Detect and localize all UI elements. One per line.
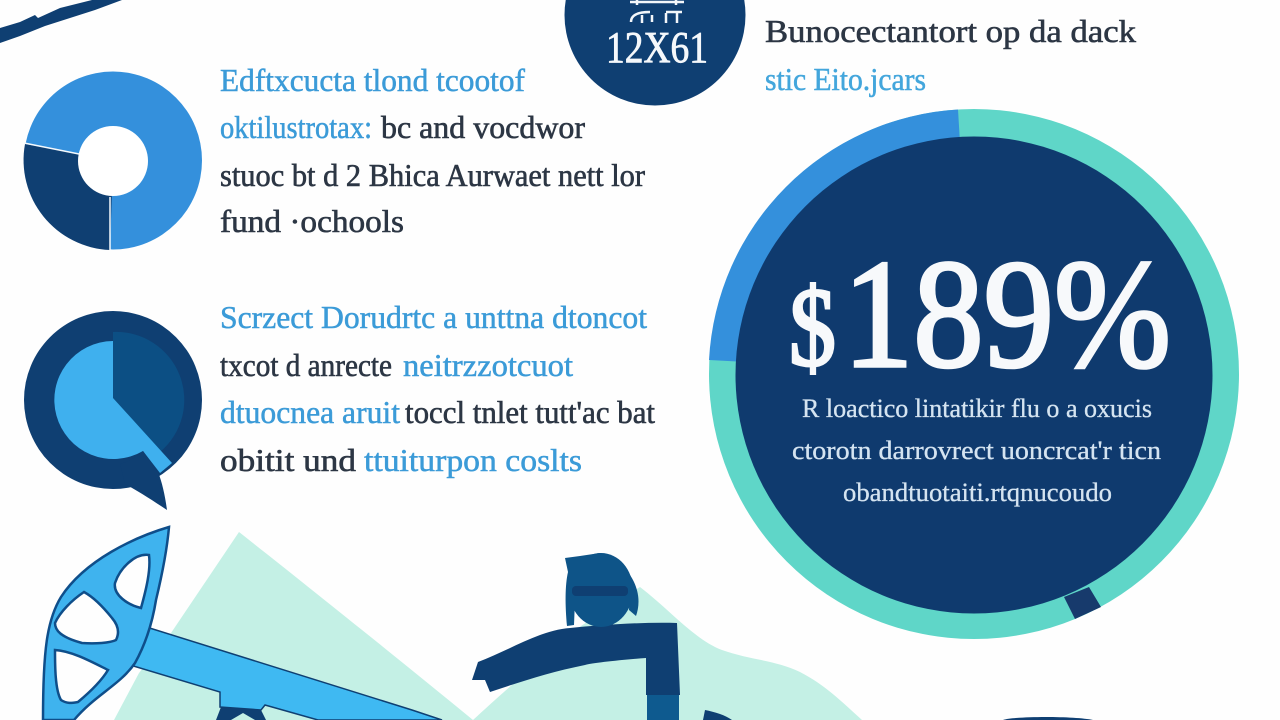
- icon: building glyph: [630, 0, 684, 23]
- text block: direct revenue: dtuocnea aruit: [220, 394, 400, 430]
- horse head: [43, 527, 169, 720]
- illustration: pumpjack: [43, 527, 442, 720]
- stat badge: top circle: [564, 0, 746, 106]
- illustration: small shape at bottom: [703, 710, 732, 720]
- chart: big ring with main stat: [709, 109, 1239, 639]
- stat: dollar sign: $: [789, 266, 836, 390]
- stat number: 12X61: [606, 23, 708, 72]
- text block: education funding: bc and vocdwor: [381, 109, 585, 145]
- text block: direct revenue: toccl tnlet tutt'ac bat: [405, 394, 655, 430]
- text block: direct revenue: neitrzzotcuot: [403, 347, 573, 383]
- icon: speech bubble chart: [24, 311, 202, 510]
- text block: top-right caption: Bunocectantort op da dack: [765, 13, 1136, 49]
- visor band: [572, 586, 628, 596]
- text block: ring caption: ctorotn darrovrect uoncrcat'r ticn: [792, 436, 1161, 465]
- text block: direct revenue: [220, 299, 655, 478]
- text block: ring caption: obandtuotaiti.rtqnucoudo: [843, 478, 1112, 507]
- text block: education funding: oktilustrotax:: [220, 109, 372, 145]
- stand: [216, 707, 266, 720]
- text block: education funding: stuoc bt d 2 Bhica Aurwaet nett lor: [220, 157, 645, 193]
- body and arm: [472, 623, 680, 695]
- illustration: mint hills: [114, 532, 862, 720]
- text block: education funding: Edftxcucta tlond tcootof: [220, 62, 525, 98]
- text block: direct revenue: Scrzect Dorudrtc a unttna dtoncot: [220, 299, 647, 335]
- text block: top-right caption: [765, 13, 1136, 97]
- stat: percentage: 189%: [843, 228, 1171, 400]
- text block: education funding: fund ·ochools: [220, 203, 404, 239]
- text block: direct revenue: obitit und: [220, 442, 356, 478]
- lower body: [647, 695, 679, 720]
- icon: top-left dark brush stroke: [0, 0, 122, 43]
- chart: donut: [24, 72, 202, 250]
- text block: ring caption: R loactico lintatikir flu o a oxucis: [802, 394, 1152, 423]
- text block: direct revenue: ttuiturpon coslts: [364, 442, 582, 478]
- beam: [130, 625, 442, 720]
- text block: ring caption: [792, 394, 1161, 507]
- illustration: dark shape bottom right: [1003, 717, 1093, 720]
- illustration: person: [472, 553, 680, 720]
- head: [565, 553, 638, 627]
- text block: direct revenue: txcot d anrecte: [220, 347, 392, 383]
- text block: top-right caption: stic Eito.jcars: [765, 61, 926, 97]
- text block: education funding: [220, 62, 645, 239]
